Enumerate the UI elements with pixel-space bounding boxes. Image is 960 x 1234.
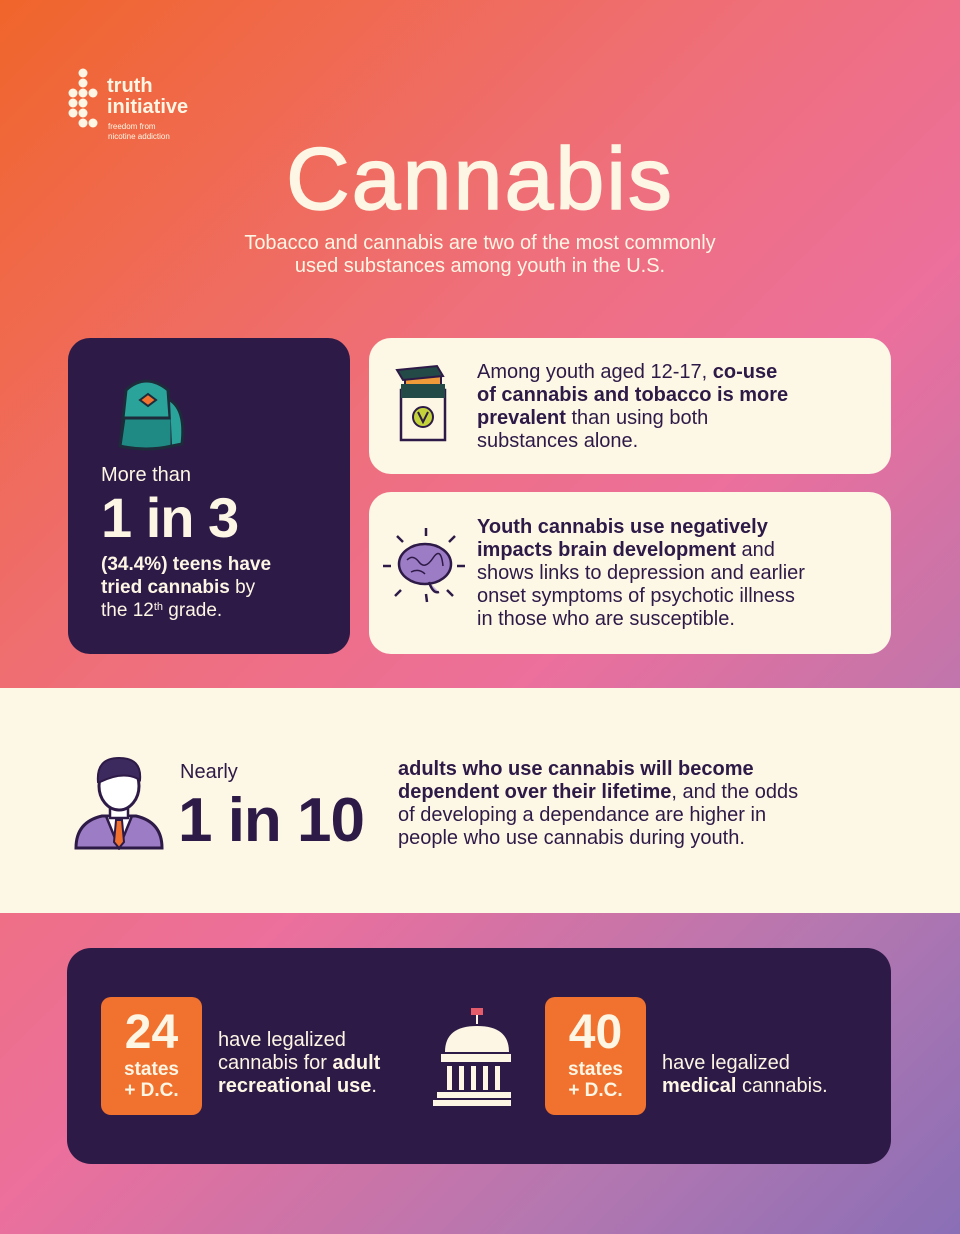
text: of developing a dependance are higher in — [398, 804, 766, 826]
icon: capitol — [433, 1008, 511, 1106]
badge: 24 states: states — [124, 1059, 179, 1080]
logo: nicotine addiction — [108, 132, 170, 141]
text: recreational — [218, 1029, 380, 1097]
text: in those who are susceptible. — [477, 608, 735, 630]
logo: freedom from — [108, 122, 156, 131]
badge: 24 states: 24 — [125, 1006, 178, 1059]
stat text: tried cannabis by — [101, 577, 255, 598]
text: medical: medical cannabis. — [662, 1075, 828, 1097]
logo: initiative — [107, 96, 188, 118]
badge: 24 states: + D.C. — [124, 1080, 179, 1101]
subtitle — [244, 232, 716, 277]
text: prevalent than using both — [477, 407, 708, 429]
text: dependent over their lifetime, and the odds — [398, 781, 798, 803]
text: people who use cannabis during youth. — [398, 827, 745, 849]
title: Cannabis — [286, 129, 674, 228]
panel: 1 in 3 teens — [68, 338, 350, 654]
icon: man in suit — [74, 757, 164, 850]
text: Youth cannabis use negatively — [477, 516, 768, 538]
text — [477, 516, 805, 630]
text: substances alone. — [477, 430, 638, 452]
panel: co-use — [369, 338, 891, 474]
text: recreational: have legalized — [218, 1029, 346, 1051]
text — [477, 361, 788, 452]
subtitle: Tobacco and cannabis are two of the most commonly — [244, 232, 716, 254]
badge: 40 states: states — [568, 1059, 623, 1080]
logo — [68, 68, 188, 141]
band: 1 in 10 adults — [0, 688, 960, 913]
panel: brain — [369, 492, 891, 654]
badge: 40 states: + D.C. — [568, 1080, 623, 1101]
stat text: (34.4%) teens have — [101, 554, 271, 575]
text: recreational: recreational use. — [218, 1075, 377, 1097]
text: onset symptoms of psychotic illness — [477, 585, 795, 607]
text — [398, 758, 798, 849]
stat text — [101, 464, 271, 621]
badge: 24 states — [101, 997, 202, 1115]
badge: 40 states — [545, 997, 646, 1115]
logo: truth — [107, 75, 153, 97]
stat: Nearly — [180, 761, 238, 783]
icon: cigarette pack — [395, 365, 446, 442]
text: shows links to depression and earlier — [477, 562, 805, 584]
text: medical — [662, 1052, 828, 1097]
panel: legalization — [67, 948, 891, 1164]
stat text: 1 in 3 — [101, 486, 238, 549]
badge: 40 states: 40 — [569, 1006, 622, 1059]
text: adults who use cannabis will become — [398, 758, 754, 780]
subtitle: used substances among youth in the U.S. — [295, 255, 665, 277]
text: recreational: cannabis for adult — [218, 1052, 380, 1074]
stat text: the 12th grade. — [101, 600, 222, 621]
text: medical: have legalized — [662, 1052, 790, 1074]
stat text: More than — [101, 464, 191, 486]
icon: backpack — [118, 380, 184, 450]
icon: brain — [383, 528, 465, 602]
text: Among youth aged 12-17, co-use — [477, 361, 777, 383]
text: of cannabis and tobacco is more — [477, 384, 788, 406]
text: impacts brain development and — [477, 539, 775, 561]
band: 1 in 10 adults: 1 in 10 — [178, 786, 364, 855]
